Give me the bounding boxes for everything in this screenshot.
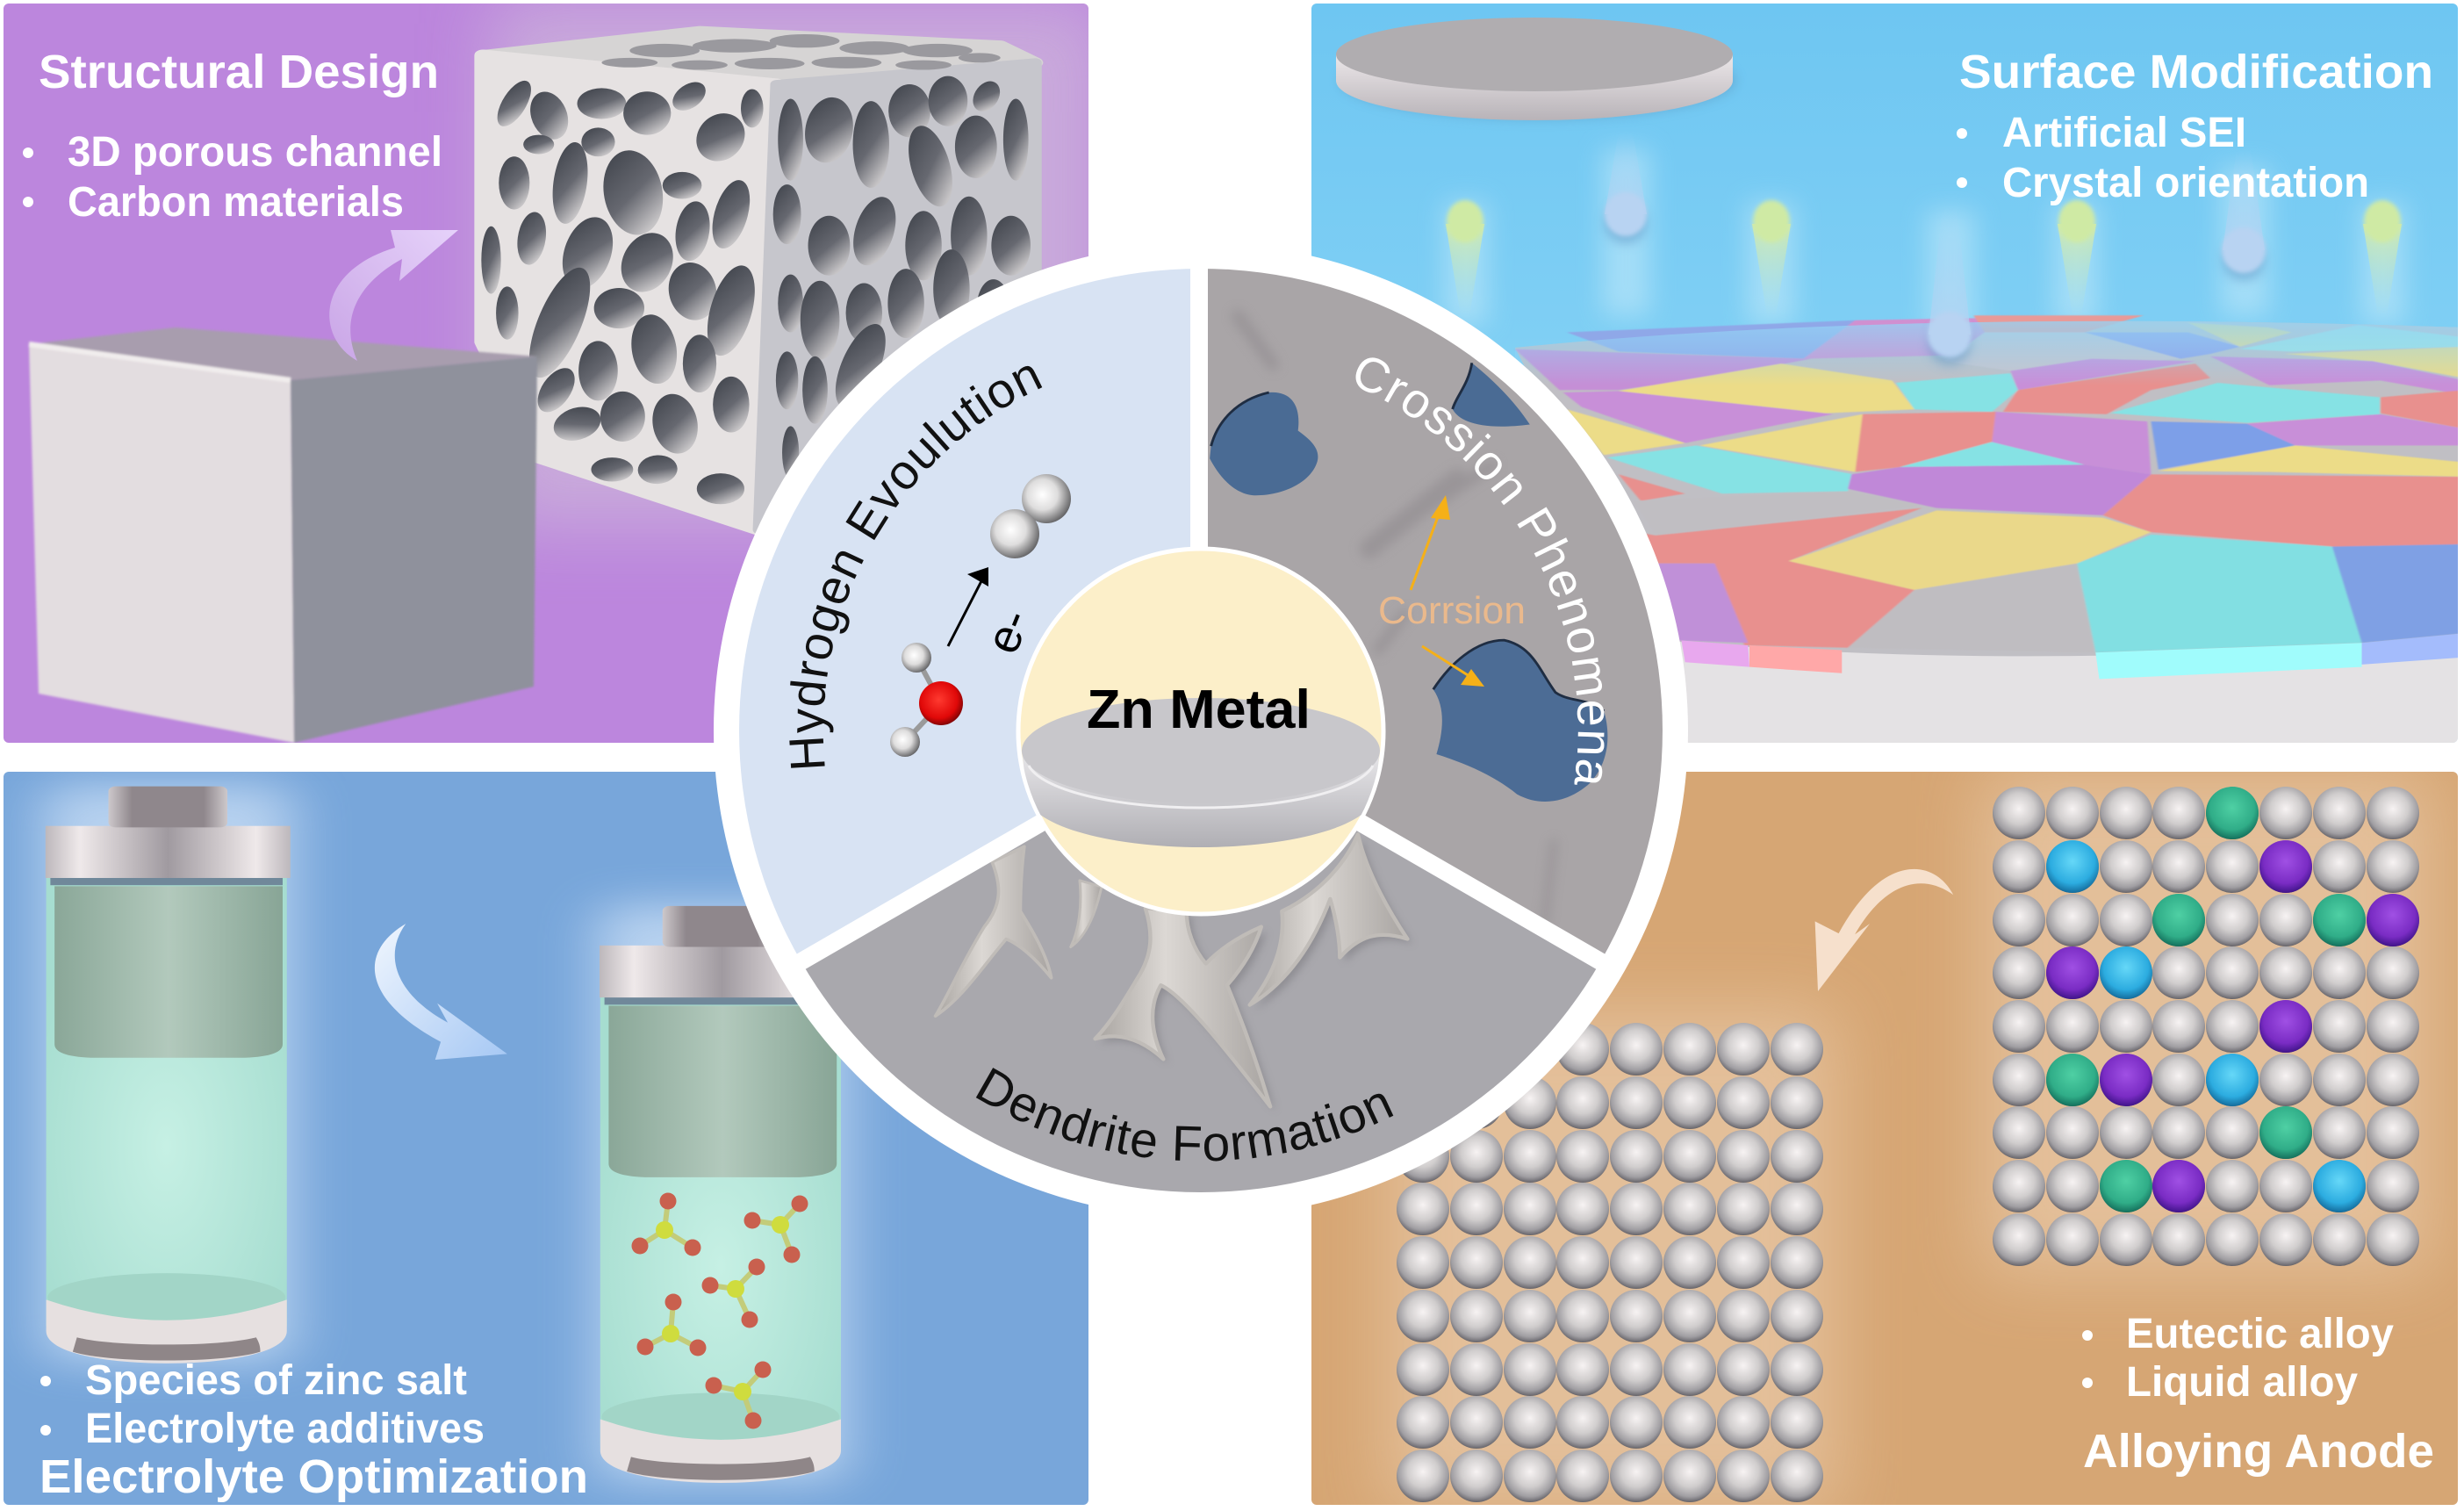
pit edge shading	[1211, 363, 1604, 711]
sulfur atoms	[656, 1216, 789, 1400]
bullet dot	[2082, 1330, 2093, 1341]
heading: electrolyte optimization: Electrolyte Optimization	[40, 1450, 588, 1503]
disc side	[1336, 54, 1733, 120]
arrow: solid to porous	[329, 230, 458, 361]
electron label: e-	[975, 601, 1040, 660]
grid glows	[1387, 773, 2432, 1510]
oxygen atoms	[632, 1192, 808, 1429]
droplet tails	[1605, 132, 2265, 335]
solid cube	[29, 327, 537, 743]
bullet text: Crystal orientation	[2002, 160, 2369, 206]
solid cube top face	[29, 327, 537, 380]
disc shadow	[1340, 42, 1736, 119]
wedge: dendrite formation	[801, 730, 1601, 1192]
bullet dot	[1957, 177, 1967, 188]
dendrite branch	[1096, 908, 1270, 1106]
batteries	[42, 784, 848, 1483]
bullet dot	[40, 1425, 51, 1435]
corrosion surface texture	[1210, 316, 1607, 922]
wedge dividers	[795, 259, 1606, 965]
bullet text: Carbon materials	[68, 179, 404, 226]
surface streaks	[1238, 316, 1554, 922]
bullet list	[2082, 1311, 2394, 1406]
water molecule	[890, 643, 963, 757]
atom grid: alloy	[1993, 787, 2419, 1266]
panel: surface modification	[1311, 4, 2464, 746]
bullet list	[23, 135, 440, 216]
label: dendrite formation: Dendrite Formation	[976, 1068, 1394, 1161]
dendrite branch	[936, 846, 1052, 1016]
bullet dot	[40, 1376, 51, 1386]
corrosion pit	[1453, 363, 1530, 427]
dendrites	[936, 834, 1412, 1112]
background glow	[492, 0, 1106, 527]
corrosion arrow up	[1411, 495, 1450, 590]
crystal floor	[1515, 315, 2464, 679]
panel: alloying anode	[1311, 772, 2458, 1510]
blue alloy atoms	[2046, 840, 2366, 1212]
blue droplets	[1605, 132, 2266, 365]
porous cube front face	[483, 55, 777, 529]
anion molecules	[632, 1192, 808, 1429]
bullet list	[1957, 110, 2369, 206]
droplet heads	[1447, 200, 2401, 242]
droplet tails	[1446, 224, 2402, 316]
grain mosaic	[1515, 315, 2464, 652]
label: zn metal: Zn Metal	[1087, 680, 1311, 740]
bullet dot	[23, 148, 33, 158]
droplet glow columns	[1444, 149, 2405, 334]
droplet shadows	[1605, 202, 2265, 365]
corrosion pits	[1210, 363, 1607, 802]
bullet text: 3D porous channel	[68, 129, 442, 176]
molecule bonds	[640, 1201, 800, 1421]
floor base	[1515, 321, 2464, 656]
green alloy atoms	[2046, 787, 2366, 1212]
panel: structural design	[4, 0, 1106, 743]
zinc disc	[1022, 698, 1380, 847]
panel background	[4, 4, 1088, 743]
curved arrow	[375, 924, 507, 1060]
bullet dot	[23, 197, 33, 207]
porous cube top face	[483, 32, 1036, 84]
solid cube front face	[29, 344, 294, 743]
floor horizon fade	[1515, 321, 2464, 385]
floating zinc disc	[1336, 18, 1736, 120]
wedge: hydrogen evolution	[739, 269, 1201, 961]
porous cube right face	[759, 62, 1036, 529]
dendrite branch	[1250, 834, 1407, 1005]
bullet text: Species of zinc salt	[85, 1357, 467, 1404]
bullet text: Eutectic alloy	[2126, 1311, 2394, 1357]
corrosion pit	[1210, 392, 1318, 495]
battery: with additives	[596, 903, 848, 1483]
purple alloy atoms	[2046, 840, 2419, 1212]
bullet dot	[1957, 128, 1967, 139]
battery: plain electrolyte	[42, 784, 294, 1363]
wedge: corrosion phenomena	[1201, 269, 1663, 961]
corrosion pit	[1433, 640, 1607, 802]
label: corrosion: Corrsion	[1378, 589, 1526, 632]
green droplets	[1446, 200, 2402, 316]
zinc centre	[1018, 549, 1383, 914]
corrosion arrow to pit	[1422, 646, 1484, 687]
hydrogen molecule	[990, 474, 1071, 558]
electron arrow	[948, 567, 988, 646]
base slab	[1311, 615, 2458, 746]
droplet heads	[1605, 192, 2266, 357]
front and right pores	[481, 76, 1031, 504]
bullet text: Artificial SEI	[2002, 110, 2246, 156]
porous cube	[481, 32, 1036, 529]
panel background	[4, 772, 1088, 1505]
zinc disc rim	[1029, 766, 1373, 808]
dendrite shadows	[1100, 839, 1412, 1112]
bullet text: Electrolyte additives	[85, 1406, 485, 1452]
disc top	[1336, 18, 1733, 91]
panel background	[1311, 4, 2458, 743]
floor side band	[1681, 633, 2464, 679]
centre cream circle	[1018, 549, 1383, 914]
outer white ring	[714, 243, 1688, 1218]
label: crossion phenomena: Crossion Phenomena	[1355, 357, 1605, 785]
dendrite branch	[1071, 881, 1102, 947]
solid cube right face	[291, 356, 537, 743]
panel: electrolyte optimization	[4, 772, 1088, 1505]
atom grid: pure zinc	[1397, 1023, 1823, 1502]
heading: alloying anode: Alloying Anode	[2083, 1425, 2434, 1478]
heading: surface modification: Surface Modification	[1959, 46, 2433, 98]
curved arrow	[1815, 869, 1953, 991]
bullet dot	[2082, 1378, 2093, 1388]
zinc disc side	[1022, 751, 1380, 847]
solid cube edge highlight	[29, 344, 291, 380]
heading: structural design: Structural Design	[39, 46, 439, 98]
central circular diagram	[714, 256, 1688, 1205]
bullet text: Liquid alloy	[2126, 1359, 2358, 1406]
zinc disc top	[1022, 698, 1380, 803]
bullet list	[40, 1357, 485, 1452]
label: hydrogen evolution: Hydrogen Evoulution	[789, 365, 1043, 768]
top pores	[601, 34, 1001, 70]
panel background	[1311, 772, 2458, 1505]
